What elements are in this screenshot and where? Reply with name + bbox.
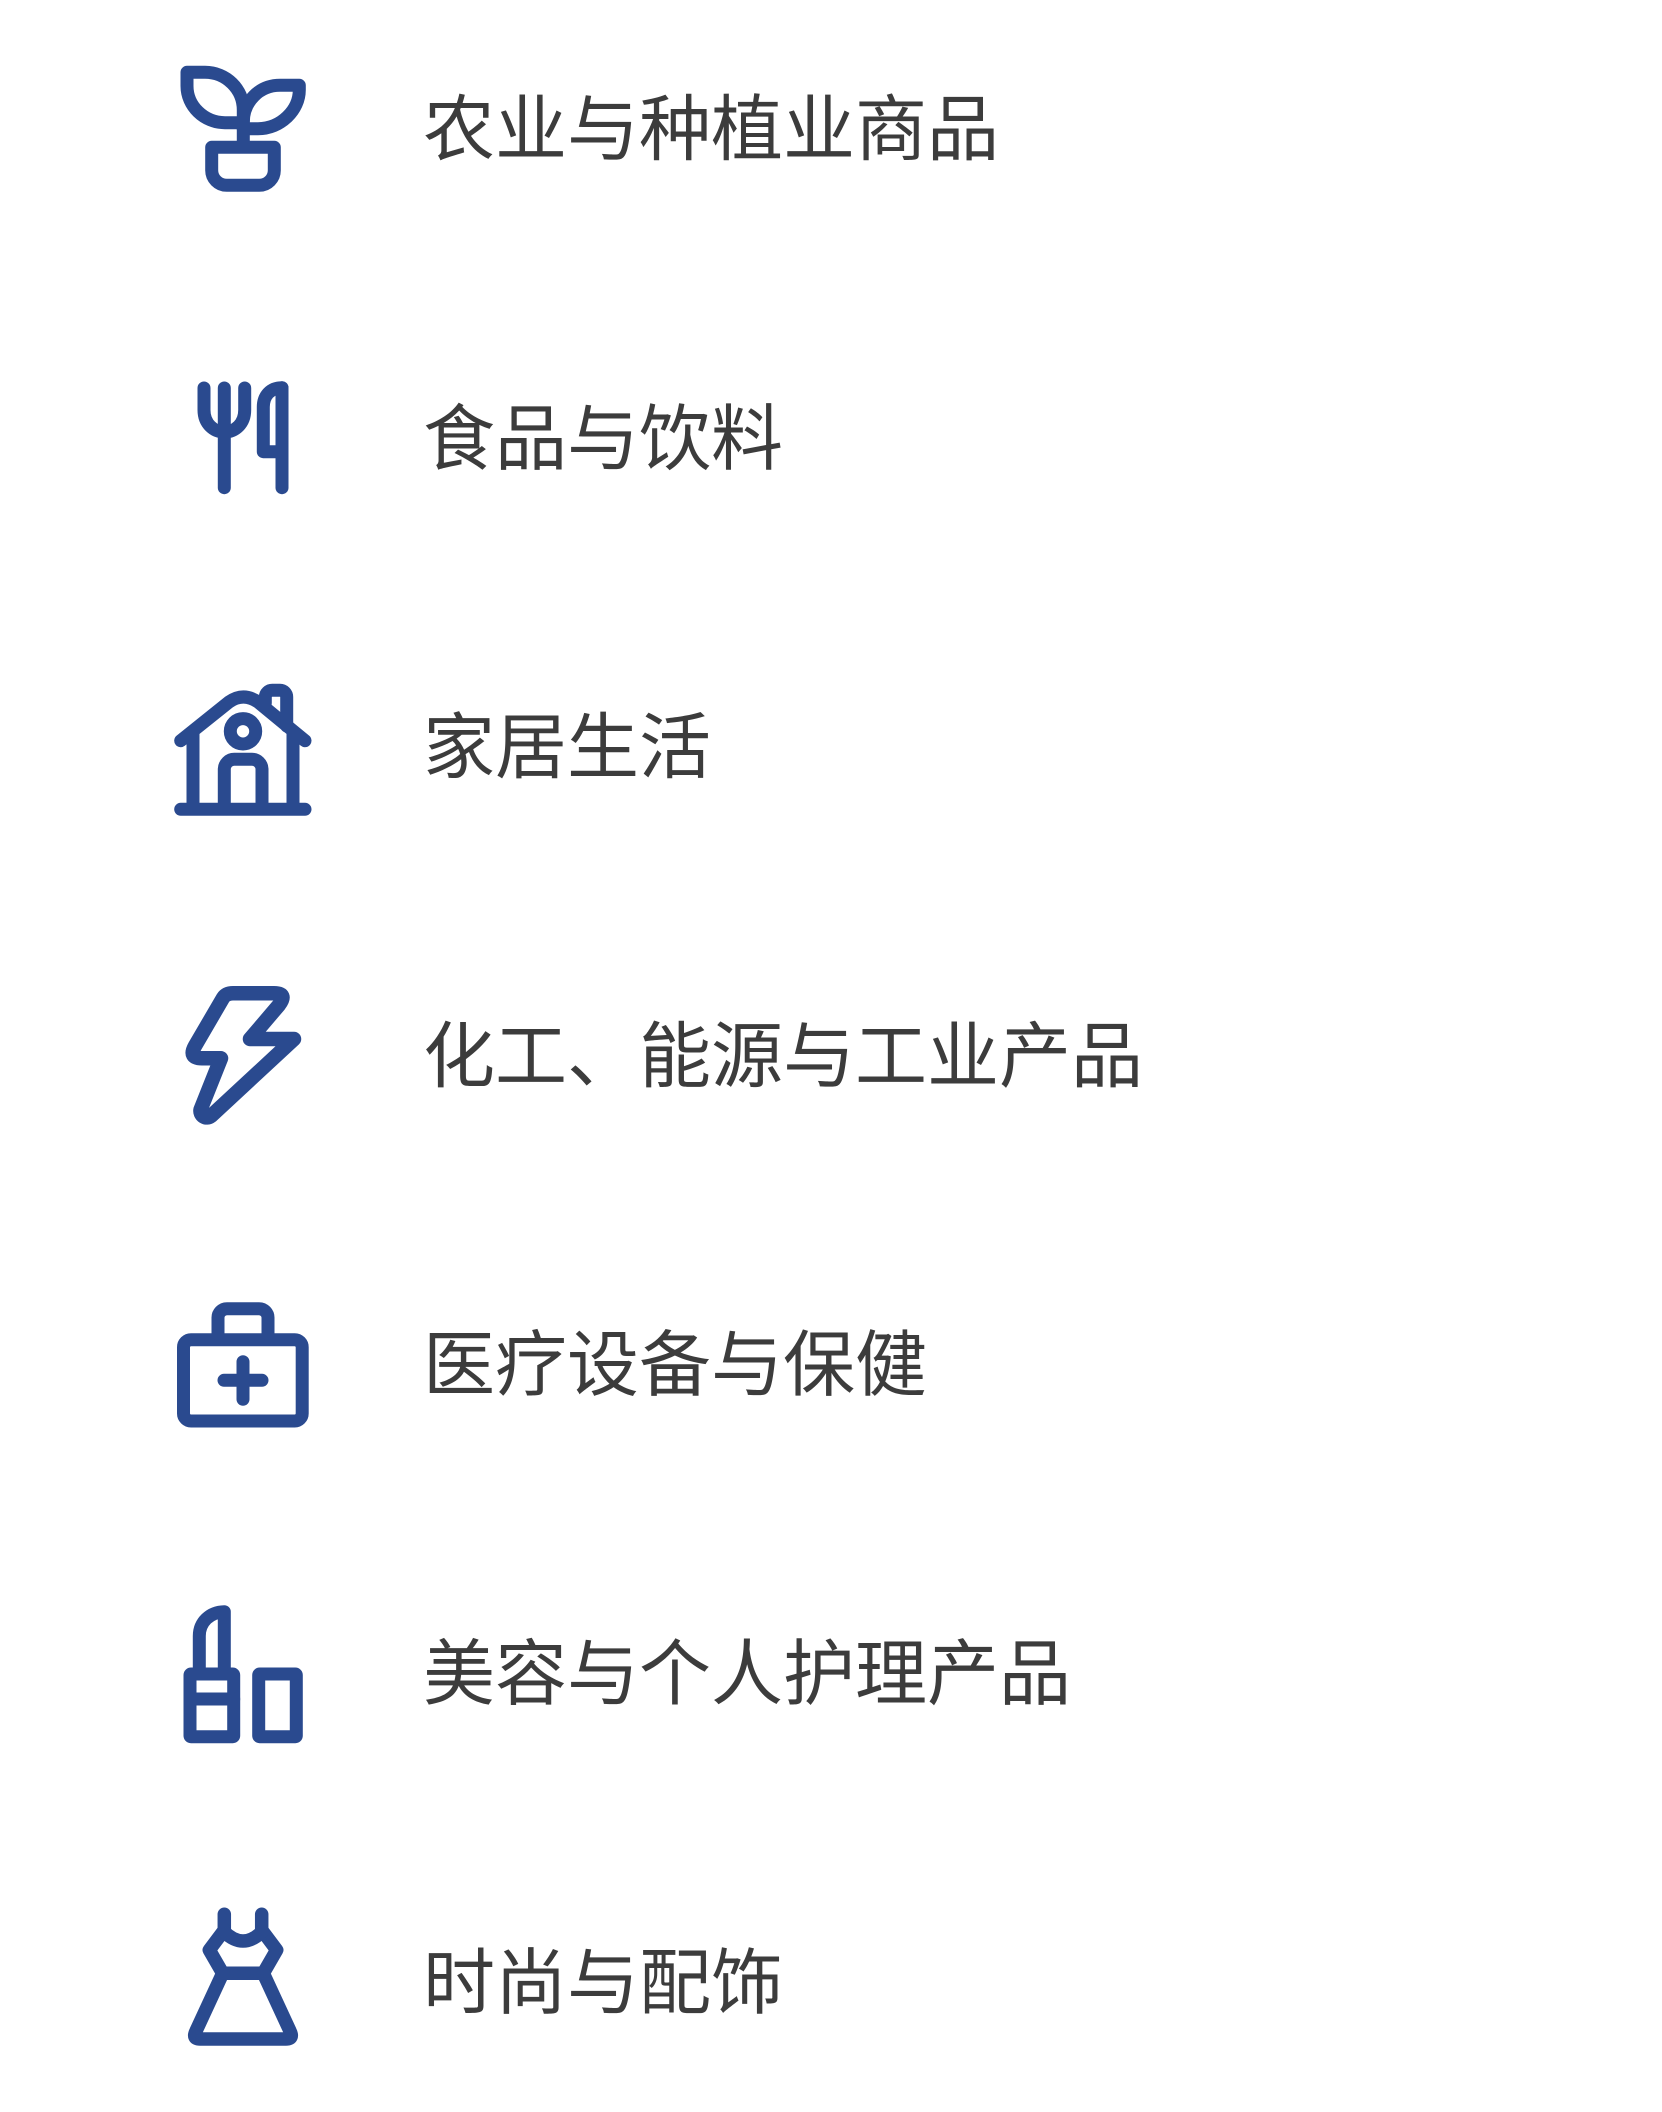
label: agriculture: 农业与种植业商品 bbox=[423, 90, 999, 170]
label: medical: 医疗设备与保健 bbox=[423, 1326, 927, 1406]
icon: house bbox=[181, 690, 305, 809]
row: chemicals and energy bbox=[193, 993, 1143, 1117]
icon: lipstick and compact bbox=[190, 1612, 296, 1737]
icon: potted plant bbox=[187, 72, 299, 185]
row: food and drink bbox=[204, 388, 783, 488]
row: beauty bbox=[190, 1612, 1071, 1737]
icon: lightning bolt bbox=[193, 993, 294, 1117]
label: food and drink: 食品与饮料 bbox=[423, 400, 783, 480]
icon: dress bbox=[195, 1914, 291, 2039]
label: chemicals and energy: 化工、能源与工业产品 bbox=[423, 1018, 1143, 1098]
row: home bbox=[181, 690, 711, 809]
label: home: 家居生活 bbox=[423, 708, 711, 788]
icon: fork and knife bbox=[204, 388, 282, 488]
label: beauty: 美容与个人护理产品 bbox=[423, 1635, 1071, 1715]
icon: medical kit bbox=[184, 1309, 302, 1421]
row: medical bbox=[184, 1309, 927, 1421]
row: fashion bbox=[195, 1914, 783, 2039]
row: agriculture bbox=[187, 72, 999, 185]
label: fashion: 时尚与配饰 bbox=[423, 1944, 783, 2024]
